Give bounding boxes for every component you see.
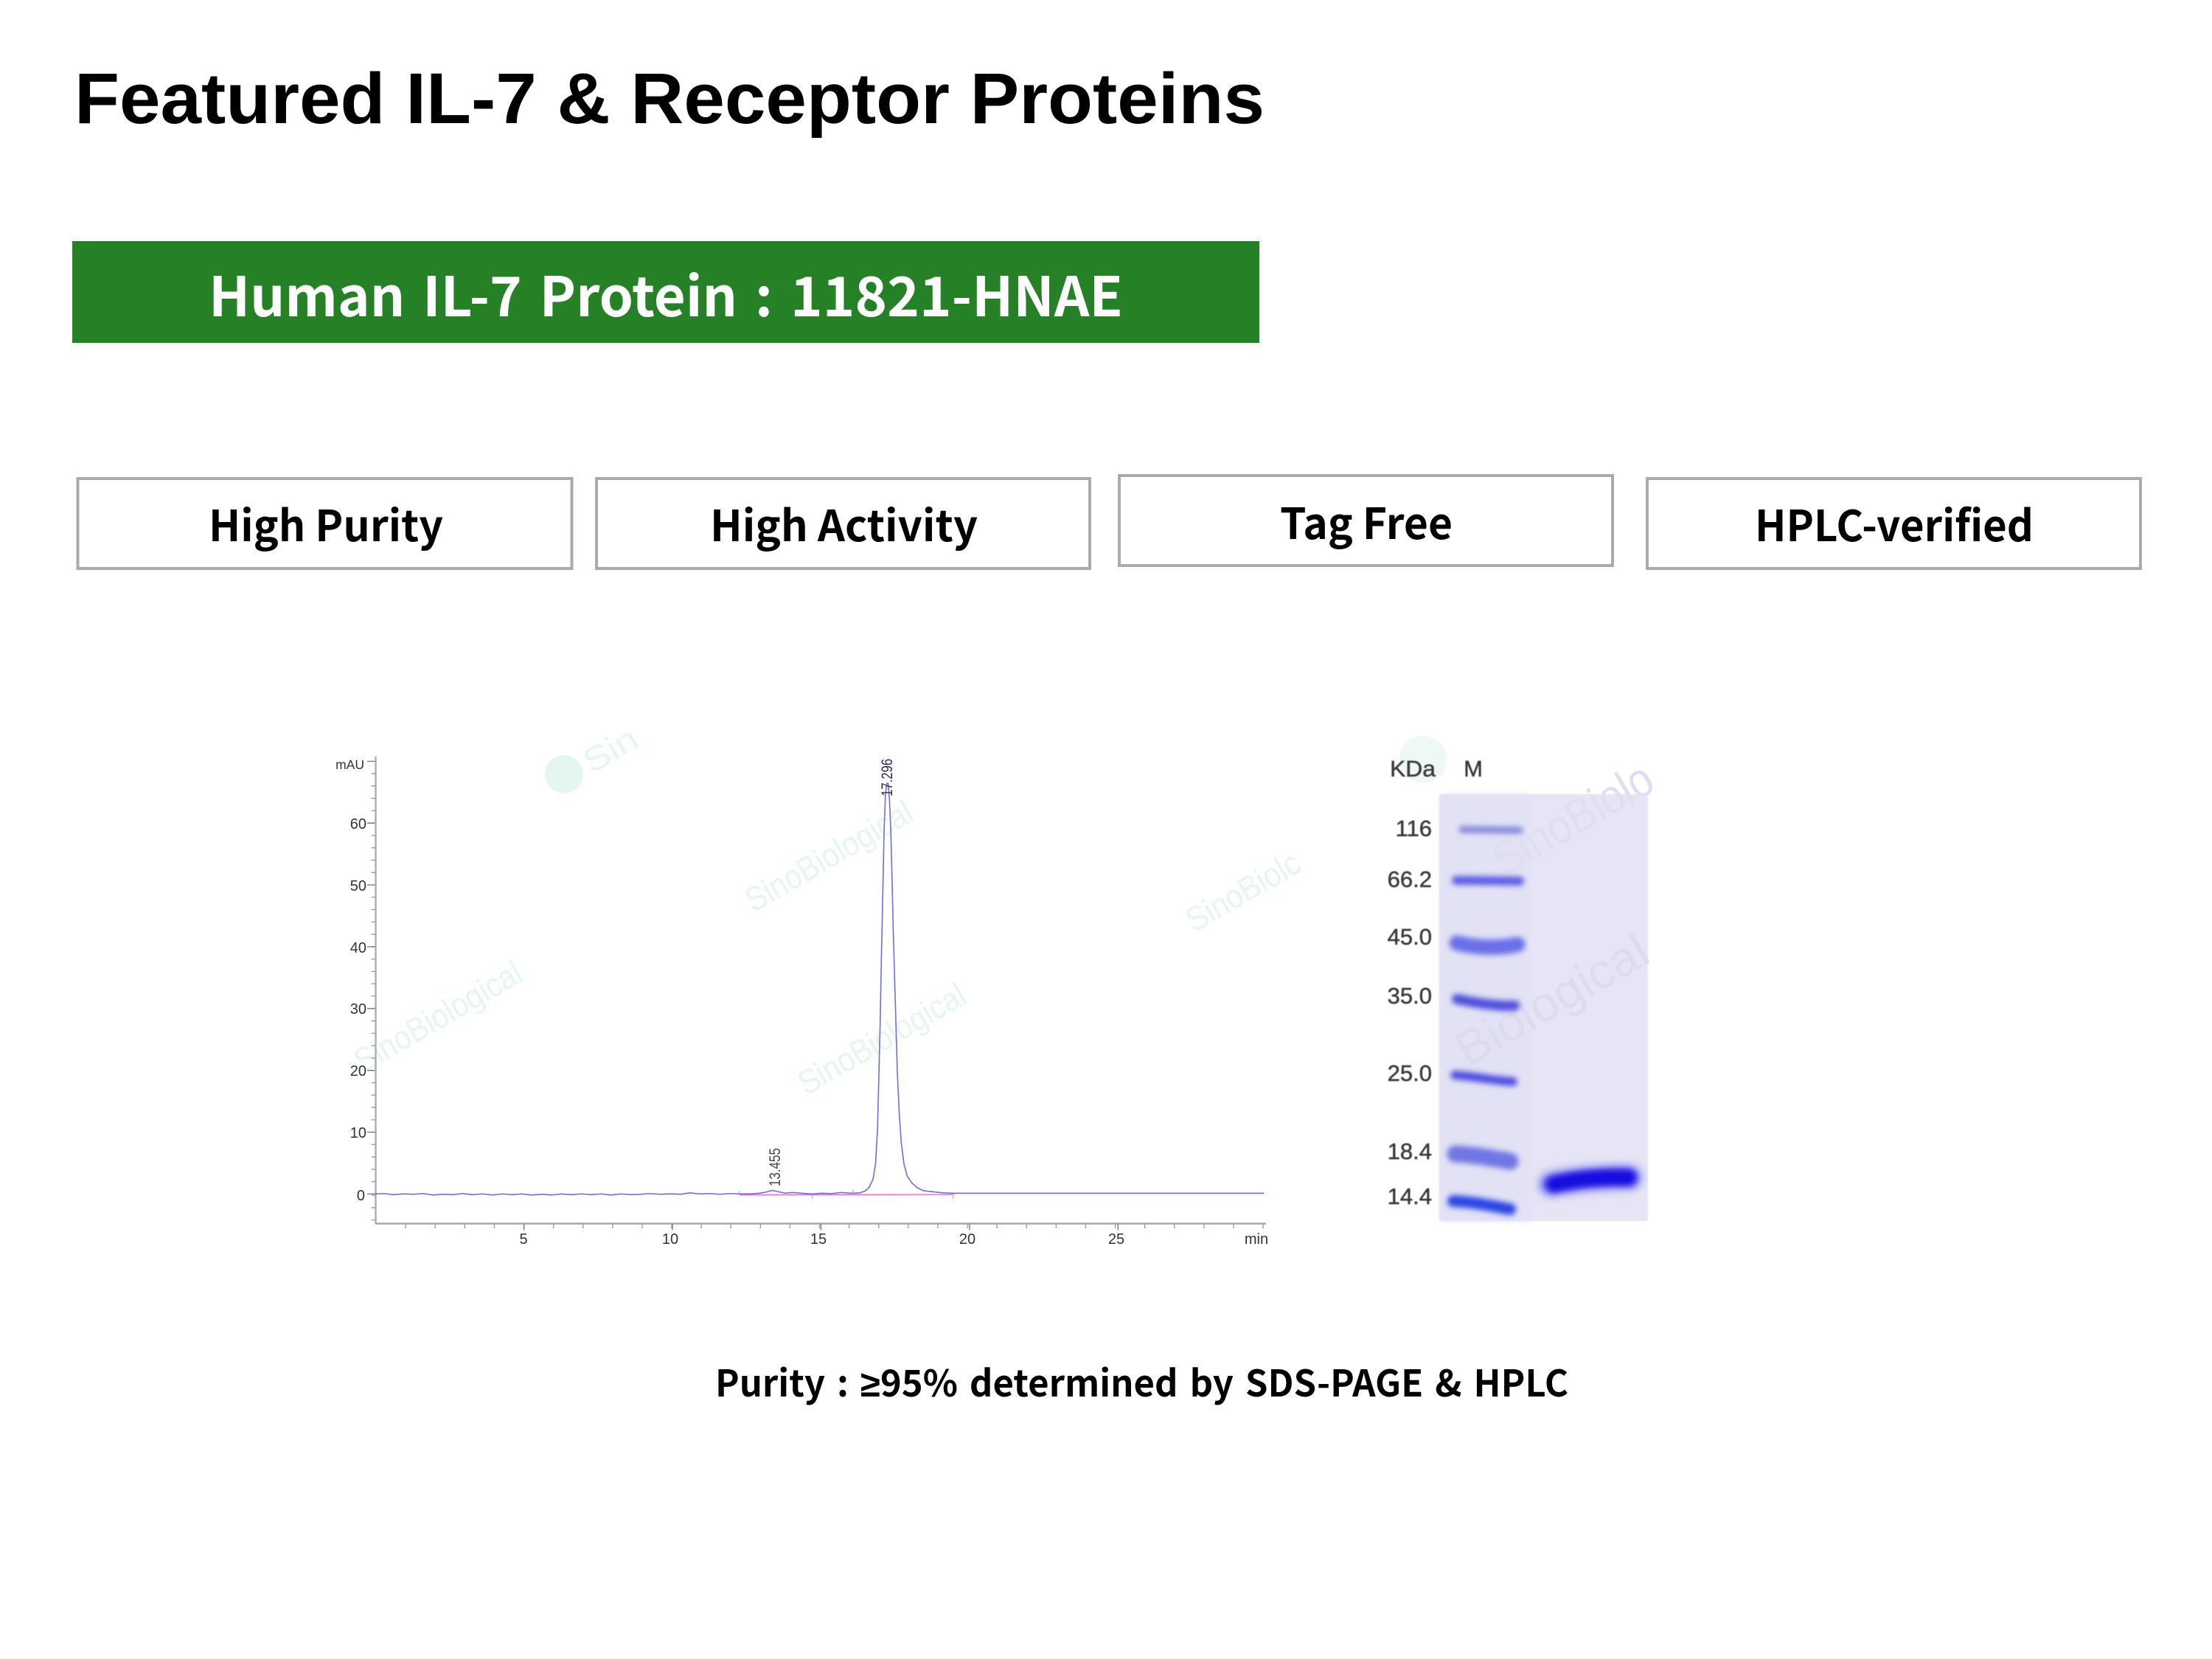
y axis labels: 60 [350,816,366,832]
y axis labels: 50 [350,878,366,894]
feature box: HPLC-verified: HPLC-verified [1755,492,2034,554]
y axis labels: 40 [350,940,366,956]
product banner [72,241,1259,343]
gel labels: 45.0 [1388,924,1432,950]
x axis labels: 20 [959,1231,975,1248]
x axis labels [519,1231,1268,1248]
gel labels: 25.0 [1388,1060,1432,1086]
feature box: High Activity [597,479,1090,568]
y axis labels: 0 [357,1188,365,1204]
x axis labels: min [1245,1231,1268,1248]
gel labels: 18.4 [1388,1138,1432,1164]
feature box: Tag Free: Tag Free [1280,490,1453,552]
chromatogram trace [375,783,1264,1199]
title: Featured IL-7 & Receptor Proteins [74,58,1265,139]
y axis labels: 20 [350,1063,366,1079]
gel labels: M [1464,756,1483,782]
gel labels: 66.2 [1388,866,1432,892]
gel labels: KDa [1390,756,1436,782]
chart watermarks: SinoBiological [791,975,973,1102]
gel watermarks: SinoBiolo [1482,751,1663,886]
marker bands [1453,830,1520,1209]
SDS-PAGE gel [1388,736,1663,1221]
feature box: High Purity: High Purity [209,492,443,554]
peak label 13.455: 13.455 [767,1148,784,1186]
gel labels [1388,756,1483,1209]
peak label 17.296: 17.296 [879,759,896,796]
gel labels: 35.0 [1388,983,1432,1009]
chart watermarks: SinoBiological [738,793,919,919]
chart watermarks: SinoBiological [347,953,529,1080]
y axis labels: 30 [350,1001,366,1018]
x axis labels: 25 [1108,1231,1124,1248]
x axis with ticks [375,1224,1266,1227]
gel background [1439,794,1648,1221]
sample band [1551,1178,1630,1184]
gel watermark circle [1399,736,1447,783]
y axis labels: mAU [335,757,364,772]
integration baseline [740,1194,953,1196]
purity caption: Purity : ≥95% determined by SDS-PAGE & HPLC [715,1354,1568,1408]
chart watermarks: SinoBiolc [1179,844,1307,939]
gel watermarks: Biological [1445,922,1658,1077]
gel labels: 116 [1396,815,1432,841]
gel watermarks [1523,771,1652,1034]
feature box: Tag Free [1119,476,1613,566]
product banner: Human IL-7 Protein : 11821-HNAE [209,254,1123,333]
y axis labels: 10 [350,1125,366,1141]
gel labels: 14.4 [1388,1183,1432,1209]
y axis with ticks [371,757,376,1224]
feature box: High Activity: High Activity [710,492,978,554]
feature box: HPLC-verified [1647,479,2140,568]
feature box: High Purity [78,479,572,568]
x axis labels: 15 [810,1231,827,1248]
chart watermarks [347,719,1307,1102]
y axis labels [335,757,366,1204]
x axis labels: 5 [519,1231,528,1248]
x axis labels: 10 [662,1231,678,1248]
HPLC chart [335,719,1307,1248]
chart watermarks: Sin [576,719,645,781]
